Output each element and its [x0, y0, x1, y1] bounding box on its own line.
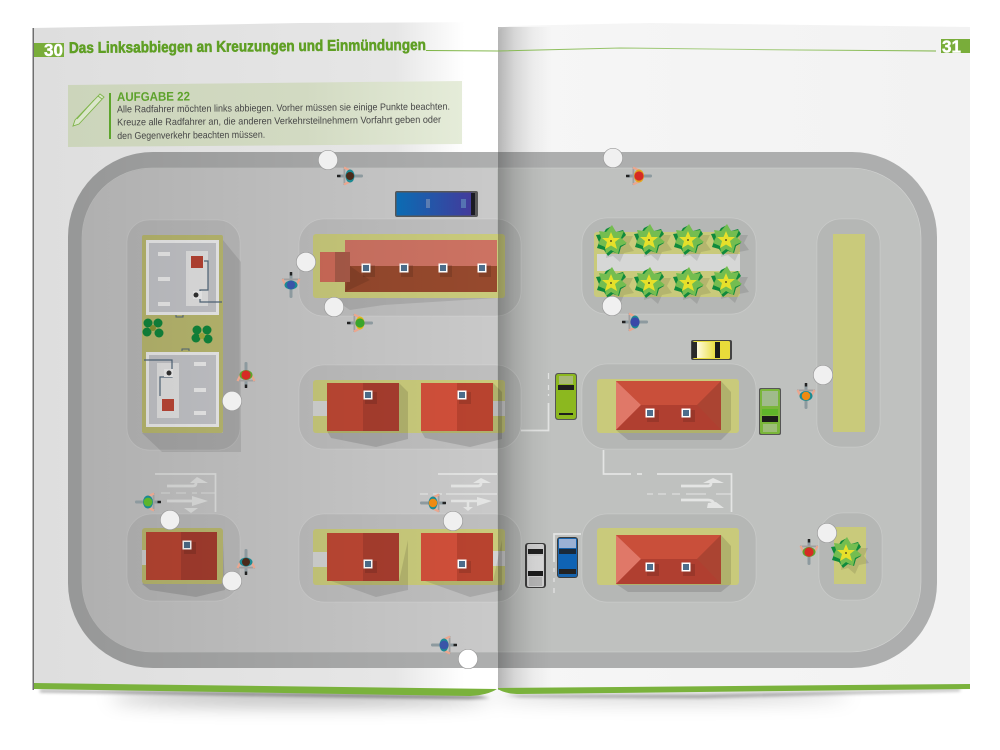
- block I: hip-roof house: [597, 528, 739, 592]
- cyclist 11: [420, 494, 446, 512]
- page number 30: 30: [44, 40, 63, 60]
- block J: small strip with plant: [831, 527, 869, 584]
- block D: green strip: [833, 234, 865, 432]
- cyclist 6: [237, 362, 255, 388]
- page number 31: 31: [942, 36, 961, 56]
- road markings: [155, 373, 732, 593]
- vehicle: green pickup: [759, 388, 781, 435]
- vehicle: silver car: [525, 543, 546, 588]
- page number 30: [34, 40, 64, 60]
- cyclist 3: [282, 272, 300, 298]
- vehicle: blue car: [557, 537, 578, 578]
- cyclist 5: [622, 313, 648, 331]
- task text: Alle Radfahrer möchten links abbiegen. Vorher müssen sie einige Punkte beachten.: [117, 102, 450, 115]
- bottom green edge right: [498, 684, 970, 694]
- block A: school buildings with trees: [142, 235, 241, 452]
- traffic islands: [127, 218, 882, 602]
- page drop shadows: [110, 691, 850, 705]
- road network: [68, 152, 937, 668]
- page number 31: [941, 36, 970, 56]
- task text: den Gegenverkehr beachten müssen.: [117, 130, 265, 142]
- cyclist 8: [800, 539, 818, 565]
- cyclist 4: [347, 314, 373, 332]
- left page spine edge: [32, 28, 34, 690]
- answer circles: [160, 148, 837, 669]
- bottom green edge left: [34, 683, 497, 696]
- task text: [117, 102, 450, 142]
- vehicle: green car: [555, 373, 577, 420]
- block C: plants on green strip: [594, 224, 749, 304]
- title: Das Linksabbiegen an Kreuzungen und Einmündungen: [69, 37, 426, 57]
- left page: [33, 22, 497, 690]
- task heading: AUFGABE 22: [117, 89, 190, 104]
- right page: [498, 23, 970, 691]
- block H: two red-roof houses: [313, 529, 505, 597]
- header rule: [426, 48, 936, 51]
- cyclist 12: [431, 636, 457, 654]
- divider bar: [109, 93, 111, 139]
- block G: single house: [142, 528, 225, 597]
- gutter shadow on right page: [498, 27, 552, 690]
- cyclist 7: [797, 383, 815, 409]
- task text: Kreuze alle Radfahrer an, die anderen Verkehrsteilnehmern Vorfahrt geben oder: [117, 115, 442, 128]
- left page shading over road: [68, 152, 372, 668]
- icon: pencil: [73, 94, 104, 126]
- cyclist 10: [237, 549, 255, 575]
- block E: two red-roof houses: [313, 380, 505, 447]
- vehicle: blue bus: [395, 191, 478, 217]
- tight page edge shadow: [40, 689, 960, 699]
- task box: [68, 81, 462, 147]
- cyclist 2: [626, 167, 652, 185]
- cyclist 9: [135, 493, 161, 511]
- vehicle: yellow car: [691, 340, 732, 360]
- block B: long building: [313, 234, 505, 310]
- block F: hip-roof house: [597, 379, 739, 440]
- cyclist 1: [337, 167, 363, 185]
